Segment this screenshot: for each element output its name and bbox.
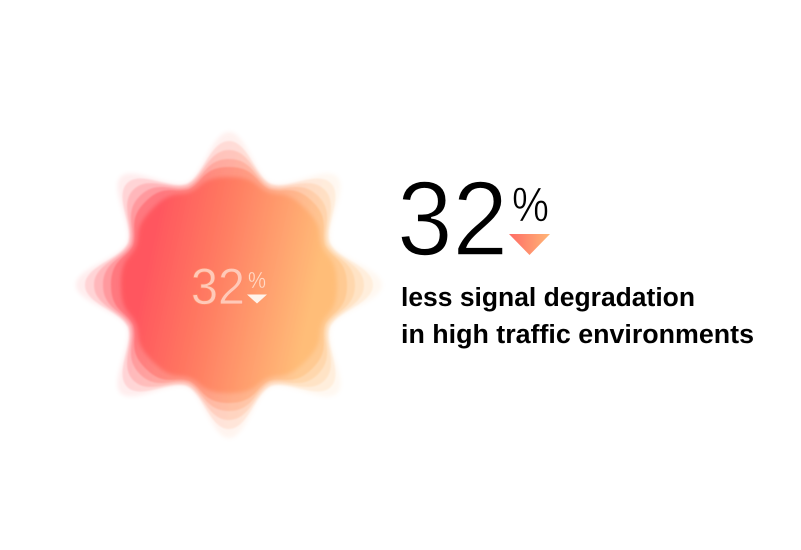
- description line 2: in high traffic environments: [401, 321, 754, 349]
- percent sign: %: [512, 179, 549, 232]
- star label: 32% with down triangle: [191, 258, 267, 315]
- star label percent sign: %: [248, 267, 266, 293]
- icon: layered gradient star burst: [76, 132, 381, 438]
- description line 1: less signal degradation: [401, 284, 695, 312]
- icon: gradient down triangle: [509, 234, 550, 255]
- star label number: 32: [191, 258, 245, 315]
- description text: [401, 284, 754, 349]
- star label down triangle: [247, 294, 267, 304]
- big statistic number: 32: [397, 160, 508, 278]
